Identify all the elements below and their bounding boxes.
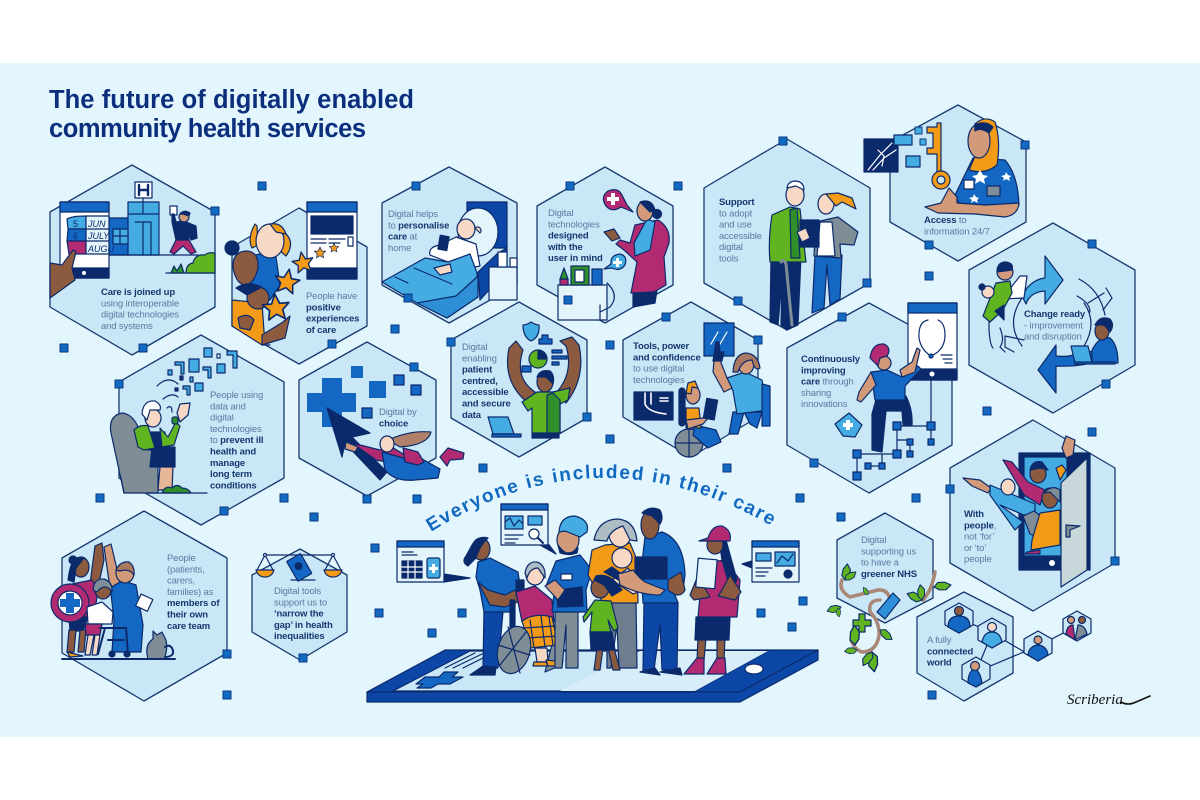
text: accessible — [719, 231, 762, 242]
illustration: x-ray and data cards — [864, 135, 920, 172]
text: members of — [167, 598, 220, 609]
text: to adopt — [719, 208, 753, 219]
text: Digital — [861, 535, 886, 546]
text: not ‘for’ — [964, 532, 994, 543]
text: support us to — [274, 597, 327, 608]
text: digital — [210, 413, 234, 424]
illustration: calendar tablet — [60, 202, 115, 278]
illustration: calendar tablet: JULY — [87, 231, 110, 241]
person: man with turban — [545, 516, 592, 668]
text: and use — [719, 220, 752, 231]
illustration: person stepping up — [835, 344, 921, 452]
text: ‘narrow the — [274, 609, 324, 620]
title: The future of digitally enabled — [49, 86, 414, 114]
text: care team — [167, 621, 210, 632]
text: of care — [306, 325, 336, 336]
text: Digital by — [379, 407, 417, 418]
text: People — [167, 553, 196, 564]
illustration: woman pointing — [713, 342, 770, 434]
text: world — [926, 658, 952, 669]
text: data — [462, 410, 482, 421]
person: nurse with phone — [464, 537, 524, 675]
person: girl with cap — [684, 526, 741, 674]
text: user in mind — [548, 253, 603, 264]
text: Digital — [548, 208, 573, 219]
text: gap’ in health — [274, 620, 333, 631]
text: innovations — [801, 399, 848, 410]
text: their own — [167, 610, 208, 620]
panel: connected world — [917, 592, 1091, 701]
illustration: stethoscope tablet — [908, 303, 957, 380]
text: conditions — [210, 480, 257, 491]
illustration: calendar tablet: AUGU — [87, 244, 115, 254]
icon: light blue arrow — [1022, 256, 1063, 304]
text: information 24/7 — [924, 226, 990, 237]
illustration: orange key — [927, 123, 950, 189]
text: greener NHS — [861, 569, 917, 580]
illustration: patient in bed — [382, 202, 517, 318]
text: Tools, power — [633, 341, 690, 352]
heading curve guide — [431, 478, 782, 532]
text: Support — [719, 197, 755, 208]
signature: Scriberia: Scriberia — [1067, 692, 1123, 708]
illustration: data icons — [522, 322, 567, 372]
text: People have — [306, 291, 357, 302]
text: using interoperable — [101, 298, 179, 309]
illustration: phone doorway — [1019, 453, 1090, 570]
text: to have a — [861, 558, 900, 569]
text: data and — [210, 401, 246, 412]
icon: speech bubbles — [603, 190, 633, 269]
panel: with people — [950, 420, 1115, 611]
text: inequalities — [274, 631, 324, 642]
text: Digital — [462, 342, 487, 353]
icon: blue arrow — [1038, 345, 1093, 393]
icon: pixels — [351, 366, 421, 418]
illustration: ratings tablet — [307, 202, 357, 279]
panel: change ready — [969, 223, 1135, 413]
text: positive — [306, 302, 341, 313]
panel: tools power and confidence — [623, 302, 770, 457]
person: man with curly hair — [618, 508, 685, 675]
title line two: community health services — [49, 115, 366, 143]
callout: charts and magnifier window — [501, 504, 556, 554]
text: Digital tools — [274, 586, 322, 597]
illustration: hand on tablet — [50, 250, 76, 298]
illustration: woman and child with laptop — [979, 262, 1027, 322]
panel: greener NHS — [826, 513, 952, 672]
text: designed — [548, 231, 589, 242]
text: and systems — [101, 321, 153, 332]
callout: analytics window — [742, 541, 799, 582]
text: choice — [379, 418, 408, 429]
illustration: running figure — [170, 206, 197, 254]
text: A fully — [927, 635, 952, 646]
illustration: woman speaking — [604, 201, 669, 307]
text: Continuously — [801, 354, 861, 365]
text: and secure — [462, 398, 511, 410]
text: technologies — [548, 219, 600, 230]
panel: access to information — [864, 105, 1026, 261]
text: families) as — [167, 587, 214, 598]
text: Access to — [924, 215, 967, 226]
illustration: flying woman — [345, 432, 464, 480]
illustration: hexagon portraits — [945, 603, 1091, 687]
illustration: family group — [225, 224, 291, 345]
text: - improvement — [1024, 320, 1083, 331]
text: accessible — [462, 387, 509, 398]
panel: continuously improving — [787, 303, 957, 493]
text: centred, — [462, 376, 498, 387]
illustration: older man and woman with tablet — [769, 181, 858, 330]
illustration: wheelchair user — [675, 381, 721, 457]
person: woman in wheelchair — [492, 562, 563, 677]
illustration: circuit network — [853, 380, 935, 480]
panel: support to adopt — [704, 139, 870, 330]
illustration: open door — [1061, 458, 1087, 587]
text: home — [388, 243, 411, 254]
text: to use digital — [633, 364, 684, 375]
panel: patient centred data — [451, 302, 587, 457]
text: improving — [801, 365, 846, 376]
illustration: data pixels — [157, 348, 237, 412]
text: to personalise — [388, 220, 449, 231]
illustration: connection lines — [959, 618, 1077, 672]
illustration: scales and phone — [256, 553, 342, 581]
text: to prevent ill — [210, 435, 263, 446]
panel: designed with the user — [537, 167, 673, 323]
connector nodes — [60, 127, 1119, 699]
text: enabling — [462, 353, 497, 364]
icon: blue plus — [307, 378, 356, 427]
illustration: bush — [186, 253, 215, 273]
text: people, — [964, 520, 996, 531]
text: and confidence — [633, 352, 701, 363]
illustration: calendar tablet: 6 — [73, 231, 78, 241]
text: patient — [462, 365, 493, 376]
text: with the — [547, 242, 583, 253]
text: Care is joined up — [101, 287, 175, 298]
illustration: vine and phone — [826, 564, 952, 672]
text: connected — [927, 646, 974, 657]
illustration: smartphone platform — [367, 650, 818, 702]
text: digital — [719, 242, 743, 253]
text: health and — [210, 446, 256, 458]
person: woman holding baby — [588, 519, 644, 668]
illustration: circuit lines and arc — [989, 279, 1112, 352]
panel: care is joined up — [50, 165, 215, 355]
text: and disruption — [1024, 332, 1082, 343]
illustration: woman in armchair — [110, 401, 207, 493]
text: long term — [210, 469, 252, 480]
text: tools — [719, 254, 739, 264]
text: people — [964, 554, 992, 565]
illustration: calendar tablet: 5 — [73, 219, 78, 229]
text: care at — [388, 232, 417, 243]
icon: stars — [262, 250, 315, 320]
text: digital technologies — [101, 310, 179, 321]
illustration: man with laptop — [1071, 318, 1118, 364]
illustration: care team group — [51, 543, 175, 659]
text: Digital helps — [388, 209, 438, 220]
illustration: side table — [558, 266, 614, 320]
text: People using — [210, 390, 263, 401]
text: sharing — [801, 388, 831, 399]
curved heading: Everyone is included in their care — [425, 464, 774, 532]
callout: calendar and medicine window — [397, 541, 470, 582]
text: experiences — [306, 314, 359, 325]
panel: prevent ill health — [110, 335, 284, 525]
illustration: people through door — [963, 436, 1075, 554]
text: Change ready — [1024, 309, 1086, 320]
text: technologies — [633, 375, 685, 386]
panel: narrow the gap — [252, 549, 347, 660]
text: carers, — [167, 576, 195, 587]
illustration: small plant — [171, 264, 184, 273]
text: or ‘to’ — [964, 543, 986, 554]
text: supporting us — [861, 546, 916, 557]
person: girl in green — [583, 575, 622, 670]
illustration: calendar tablet: JUN — [87, 219, 106, 229]
illustration: blue data panel — [704, 323, 734, 356]
panel: members of their own care team — [51, 511, 227, 701]
illustration: hospital — [107, 182, 215, 273]
panel: positive experiences — [225, 202, 367, 364]
illustration: man raising arms — [508, 337, 581, 438]
signature: Scriberia — [1067, 692, 1150, 708]
illustration: x-ray panel — [634, 392, 673, 420]
panel: personalise care — [382, 167, 517, 323]
illustration: woman in hijab — [925, 119, 1019, 217]
panel: digital by choice — [299, 342, 464, 496]
text: care through — [801, 377, 854, 388]
text: manage — [210, 458, 245, 469]
illustration: laptop — [488, 417, 521, 437]
illustration: group of people — [464, 508, 741, 677]
text: With — [964, 509, 984, 520]
text: technologies — [210, 424, 262, 435]
text: (patients, — [167, 564, 205, 575]
icon: cursor arrow — [327, 408, 387, 480]
